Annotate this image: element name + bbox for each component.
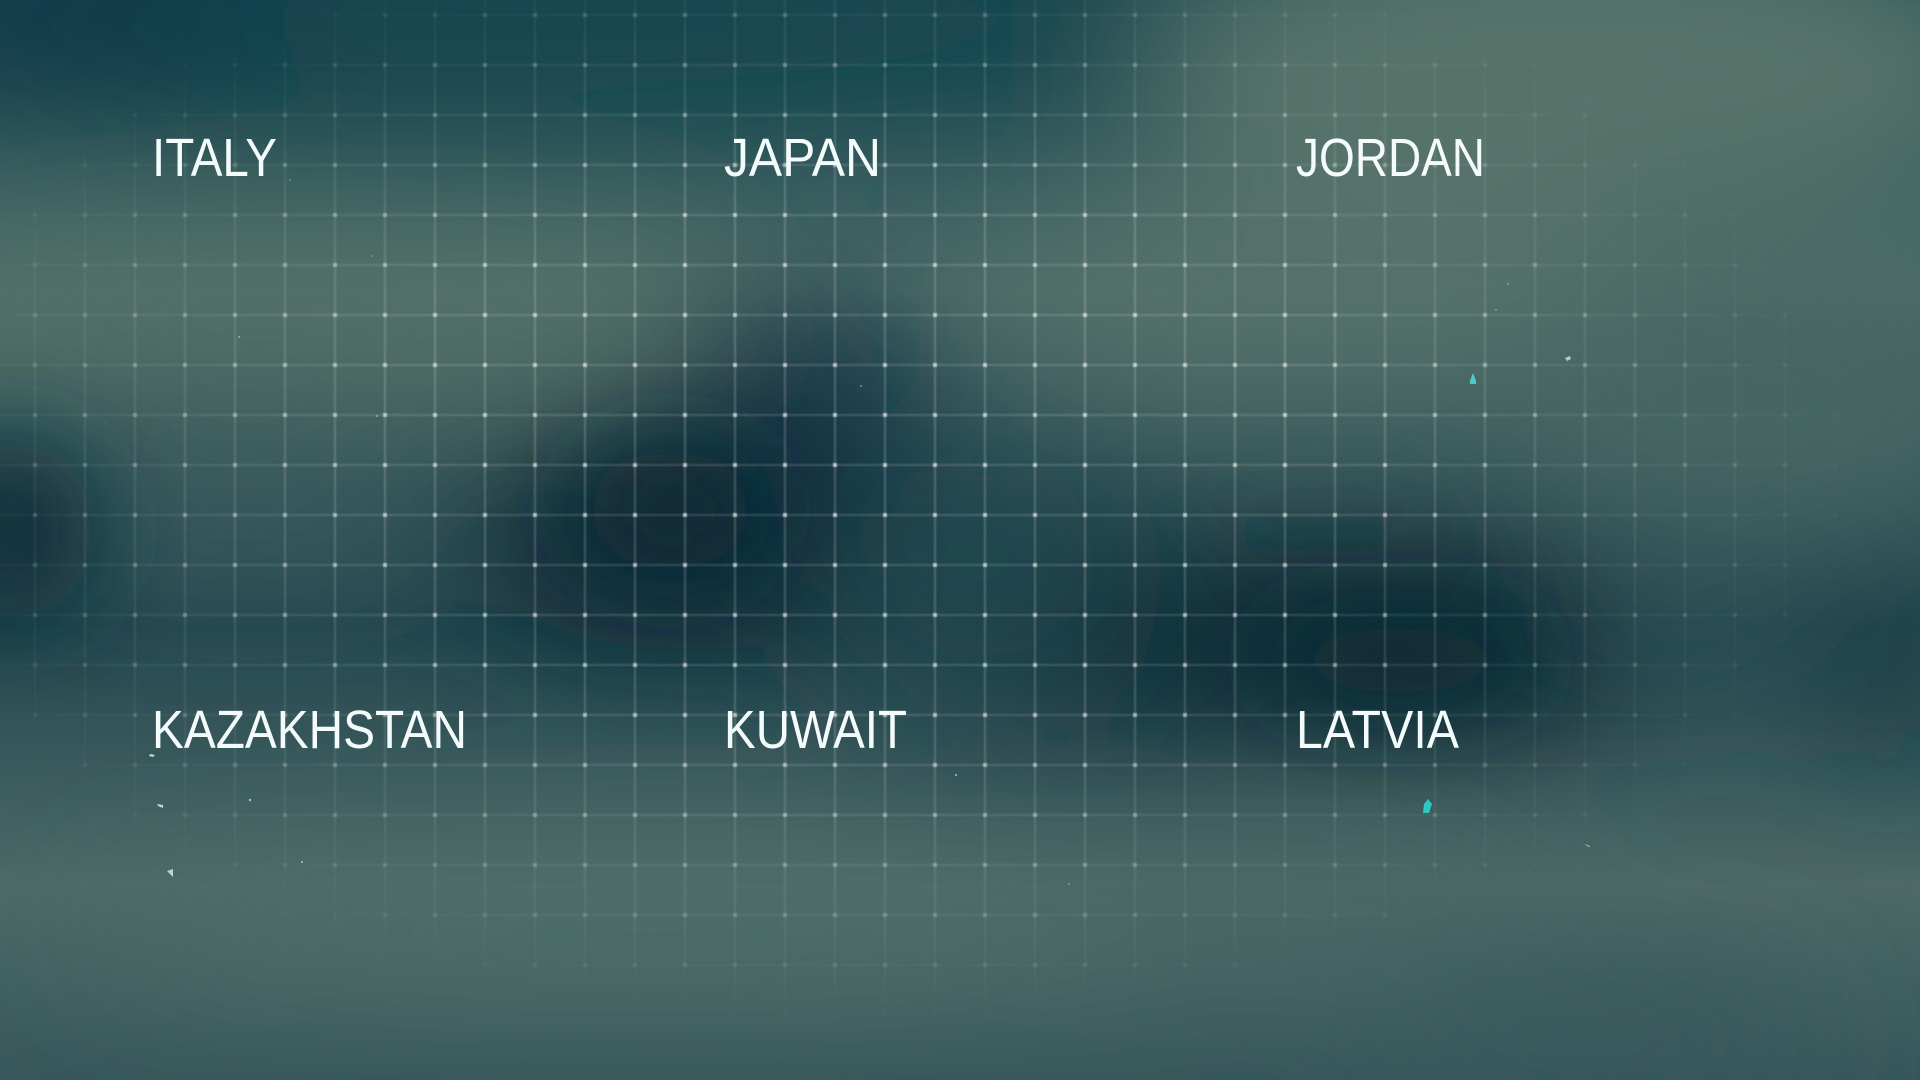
particles: small cyan and pale specks xyxy=(149,179,1590,885)
label: Kuwait: KUWAIT xyxy=(724,700,907,760)
label: Kazakhstan: KAZAKHSTAN xyxy=(152,700,467,760)
label: Italy: ITALY xyxy=(152,128,277,188)
label: Jordan: JORDAN xyxy=(1296,128,1485,188)
label: Latvia: LATVIA xyxy=(1296,700,1459,760)
label: Japan: JAPAN xyxy=(724,128,881,188)
